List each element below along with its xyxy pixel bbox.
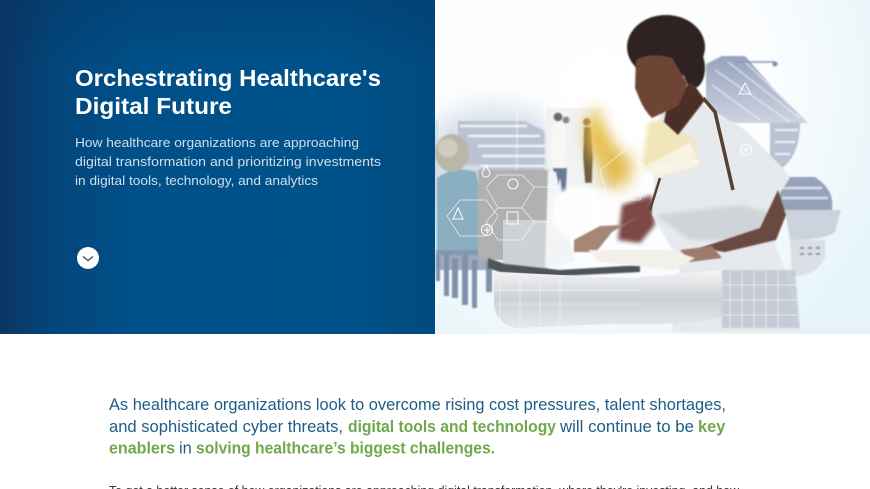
- background glow: [435, 0, 870, 334]
- intro text block: [109, 396, 740, 489]
- subtitle: How healthcare organizations are approaching: [75, 135, 359, 150]
- white icons on overlay: [453, 83, 752, 236]
- lower drum: [778, 177, 832, 210]
- hero text: [75, 65, 382, 269]
- far right building: [706, 56, 841, 276]
- lead paragraph: in: [179, 440, 192, 458]
- elderly person seen from behind: [435, 134, 488, 255]
- panel: blue hero: [0, 0, 435, 334]
- subtitle: [75, 135, 382, 188]
- lead paragraph: key: [698, 418, 726, 436]
- writing hand: [680, 246, 722, 262]
- panel: hero illustration: [435, 0, 870, 334]
- icon: scroll down chevron: [77, 247, 99, 269]
- neck: [664, 82, 705, 135]
- subtitle: in digital tools, technology, and analytics: [75, 173, 319, 188]
- hospital building left: [458, 105, 546, 190]
- glass grid on scrubs: [722, 270, 800, 328]
- dark keyboard band: [488, 258, 640, 276]
- nurse: [574, 15, 800, 332]
- window corridor with people: [546, 108, 616, 192]
- nurse arm and skin behind: [618, 195, 655, 243]
- grey tablet hexagon screen: [478, 170, 550, 260]
- yellow light glow: [586, 109, 632, 188]
- title: [75, 65, 381, 119]
- title: Digital Future: [75, 93, 232, 119]
- subtitle: digital transformation and prioritizing investments: [75, 154, 382, 169]
- face: [635, 55, 688, 118]
- lead paragraph: and sophisticated cyber threats,: [109, 418, 343, 436]
- lead paragraph: enablers: [109, 440, 175, 458]
- roof: [706, 56, 808, 123]
- lead paragraph: solving healthcare’s biggest challenges.: [196, 440, 495, 458]
- hair: [627, 15, 705, 88]
- left edge tint: [435, 120, 438, 270]
- yellowed collar: [642, 120, 697, 177]
- nurse arm: [700, 190, 786, 252]
- table / reception desk: [494, 270, 722, 328]
- stethoscope straps: [703, 98, 733, 190]
- lead paragraph: As healthcare organizations look to overcome rising cost pressures, talent shortages,: [109, 396, 726, 414]
- lead paragraph: will continue to be: [559, 418, 694, 436]
- hazy backdrop behind scene: [415, 108, 575, 232]
- title: Orchestrating Healthcare's: [75, 65, 381, 91]
- small city skyline: [436, 250, 492, 308]
- lead paragraph: [109, 396, 726, 458]
- lead paragraph: digital tools and technology: [348, 418, 557, 436]
- network hexagon overlay: [447, 150, 700, 240]
- laptop screen: [545, 170, 575, 268]
- white paper: [588, 250, 695, 270]
- upper drum: [770, 123, 800, 168]
- scrubs: [652, 102, 800, 332]
